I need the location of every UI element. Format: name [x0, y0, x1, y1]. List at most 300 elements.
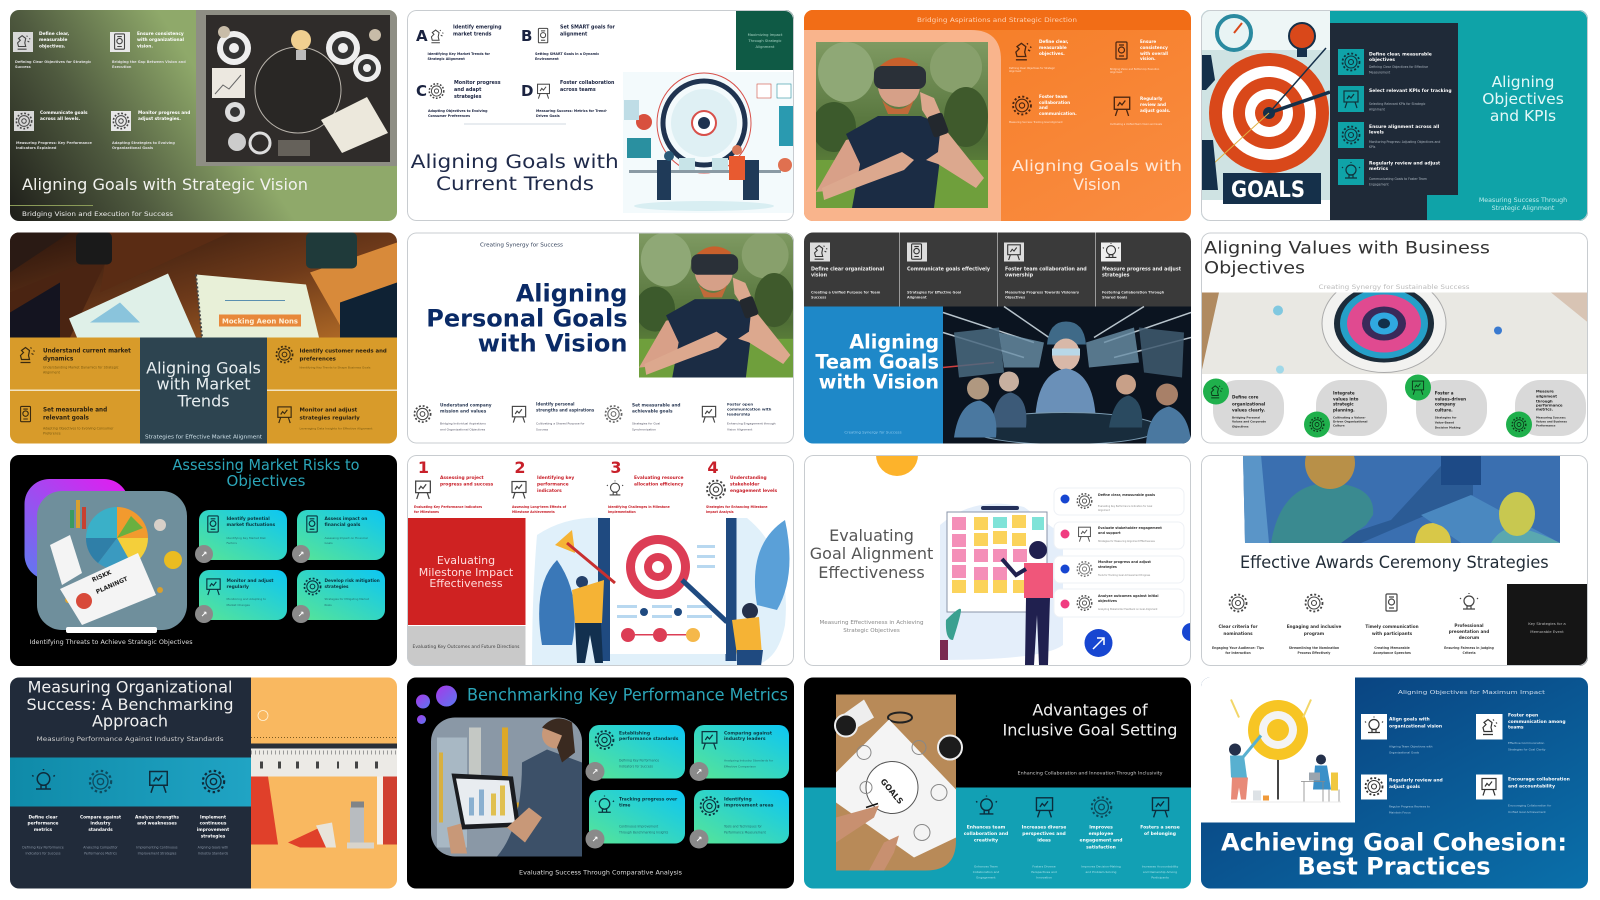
panel: Advantages of Inclusive Goal Setting: [804, 678, 1191, 888]
item 1: Understanding Market Dynamics for Strategic: [43, 366, 119, 370]
tile 3: ↗: [201, 610, 207, 619]
item 4: Measuring Success:: [1536, 416, 1566, 420]
callout: dark box: Key Strategies for a: [1528, 621, 1566, 626]
step 1: Assessing project: [440, 475, 484, 481]
title: Aligning: [849, 330, 939, 354]
dark panel with KPI list: Communicating Goals to Foster Team: [1369, 177, 1427, 181]
item 1: [1203, 378, 1284, 436]
dark panel with KPI list: Regularly review and adjust: [1369, 160, 1441, 166]
tile 3: [586, 790, 685, 848]
image: notebook on wooden table: [10, 232, 397, 338]
title: Vision: [1073, 175, 1121, 194]
tile 4: improvement areas: [724, 802, 774, 808]
subtitle: Strategies for Effective Market Alignment: [145, 434, 262, 440]
benefit 3: Improves Decision-Making: [1081, 864, 1121, 868]
tile 4: ↗: [298, 610, 304, 619]
panel: Benchmarking Key Performance Metrics: [407, 678, 794, 888]
step 4: 4: [707, 458, 719, 477]
strategy 2: Streamlining the Nomination: [1289, 646, 1339, 650]
title: Assessing Market Risks to: [172, 456, 360, 474]
dark panel with KPI list: Select relevant KPIs for tracking: [1369, 88, 1452, 94]
item 1: Defining Clear Objectives for Strategic: [1009, 67, 1056, 70]
panel: Aligning Personal Goals with Vision: [407, 232, 794, 444]
metric 4: strategies: [201, 834, 226, 840]
item D: Foster collaboration: [560, 80, 615, 86]
panel: Effective Awards Ceremony Strategies: [1201, 437, 1588, 666]
tile 2: ↗: [298, 550, 304, 559]
item 3: Set measurable and: [632, 402, 680, 408]
item 3: values-driven: [1435, 396, 1466, 402]
item 3: culture.: [1435, 408, 1453, 412]
item 2: consistency: [1140, 45, 1168, 50]
item 4: alignment: [1536, 394, 1557, 398]
tile 3: Monitoring and Adapting to: [226, 597, 266, 601]
title: Effectiveness: [818, 563, 925, 582]
strategy 1: nominations: [1223, 631, 1253, 636]
title: Team Goals: [815, 350, 939, 374]
metric 4: [197, 814, 229, 856]
item 1: Define clear organizational: [811, 266, 884, 272]
item 2: communication among: [1508, 719, 1566, 725]
strategy 2: Engaging and inclusive: [1287, 624, 1341, 629]
list item 4: objectives: [1098, 599, 1117, 603]
tile 3: Through Benchmarking Insights: [618, 830, 669, 834]
item 2: preferences: [300, 356, 336, 362]
item 2: Ensure: [1140, 39, 1156, 44]
panel: Aligning Team Goals with Vision: [804, 232, 1191, 444]
item 2: strengths and aspirations: [536, 408, 595, 412]
item D: D: [521, 82, 533, 100]
tile 3: Tracking progress over: [619, 796, 678, 802]
item: monitor progress: Adapting Strategies to Evolving: [112, 141, 175, 145]
title: [1012, 160, 1180, 190]
item: define clear objectives: measurable: [39, 37, 67, 43]
benefit 3: satisfaction: [1086, 844, 1116, 850]
metric 3: Analyze strengths: [135, 814, 179, 820]
title: [1221, 828, 1567, 880]
item 4: leadership: [727, 412, 750, 416]
item A: Strategic Alignment: [428, 57, 465, 61]
title block: Milestone Impact: [419, 566, 514, 579]
item B: alignment: [560, 32, 588, 38]
item: define clear objectives: Success: [15, 65, 31, 69]
title: Measuring Organizational: [28, 678, 232, 696]
image: man wearing VR headset: [639, 232, 794, 378]
item: communicate goals: Measuring Progress: Key Performance: [16, 141, 92, 145]
metric 3: Implementing Continuous: [136, 846, 178, 850]
list item 1: Alignment: [1098, 509, 1110, 512]
item 1: Bridging Personal: [1232, 416, 1260, 420]
item: define clear objectives: [13, 31, 91, 69]
item: ensure consistency: vision.: [137, 44, 153, 50]
list item 3: strategies: [1098, 565, 1117, 569]
title: with Vision: [819, 370, 939, 394]
item 4: Encourage collaboration: [1508, 776, 1570, 782]
tile 2: Analyzing Industry Standards for: [724, 758, 774, 762]
title block: Evaluating: [437, 554, 495, 567]
item 3: achievable goals: [632, 408, 673, 414]
tile 3: Market Changes: [226, 603, 250, 607]
title block: Effectiveness: [429, 577, 503, 590]
item 4: Monitor and adjust: [300, 408, 358, 414]
dark panel with KPI list: levels: [1369, 130, 1384, 136]
item 4: and accountability: [1508, 784, 1555, 790]
step 1: 1: [418, 458, 429, 477]
title: [426, 280, 628, 358]
item C: and adapt: [454, 87, 482, 93]
item D: [521, 80, 615, 118]
item 1: Define clear,: [1039, 39, 1069, 44]
list item 1: [1054, 488, 1184, 515]
item 3: Strategies for: [1435, 416, 1457, 420]
metric 1: Defining Key Performance: [22, 846, 64, 850]
tile 1: Establishing: [619, 730, 650, 736]
light panel: [804, 30, 1001, 221]
benefit 1: Enhances team: [967, 824, 1006, 830]
item B: Setting SMART Goals in a Dynamic: [535, 52, 599, 56]
list item 3: Tools for Tracking Goal Achievement Progress: [1098, 574, 1151, 577]
list item 2: Strategies for Measuring Alignment Effectiveness: [1098, 540, 1156, 543]
callout: green box: Through Strategic: [747, 39, 782, 43]
subtitle: Bridging Vision and Execution for Success: [22, 210, 174, 218]
strategy 1: for Interaction: [1225, 651, 1251, 655]
image: risk planning pie chart: PLANINGT: [95, 575, 130, 596]
item: monitor progress: Monitor progress and: [138, 110, 190, 116]
icon: arrow button: [1084, 629, 1112, 657]
item 4: Enhancing Engagement through: [727, 422, 776, 426]
dark panel with KPI list: Engagement: [1369, 182, 1390, 186]
item: ensure consistency: [110, 31, 186, 69]
item C: Consumer Preferences: [428, 114, 470, 118]
title: with Market: [156, 374, 251, 394]
benefit 1: Engagement: [976, 876, 996, 880]
metric 4: Industry Standards: [198, 852, 228, 856]
item 4: strategies regularly: [300, 416, 360, 422]
item 2: teams: [1508, 724, 1524, 730]
item 3: Regular Progress Reviews to: [1389, 804, 1430, 808]
item 2: Driven Organizational: [1333, 420, 1368, 424]
item 2: Cultivating a Values-: [1333, 416, 1367, 420]
item C: strategies: [454, 94, 482, 100]
callout: dark box: [1507, 584, 1588, 666]
item 4: Foster open: [727, 402, 753, 406]
benefit 4: of belonging: [1144, 831, 1176, 837]
item 2: values into: [1333, 396, 1359, 402]
item D: Driven Goals: [536, 114, 560, 118]
item 4: Vision Alignment: [727, 428, 753, 432]
strategy 2: program: [1304, 631, 1325, 636]
item 4: [1101, 242, 1182, 300]
list item 3: [1054, 556, 1184, 583]
title: Aligning Goals with: [1012, 157, 1182, 175]
benefit 2: [1022, 798, 1066, 880]
benefit 1: collaboration and: [964, 831, 1008, 837]
list item 2: and support: [1098, 531, 1121, 535]
item 1: Aligning Team Objectives with: [1389, 744, 1433, 748]
item 4: Leveraging Data Insights for Effective Alignment: [300, 426, 373, 430]
list item 1: Evaluating Key Performance Indicators for Goal: [1098, 505, 1153, 508]
strategy 4: Criteria: [1462, 651, 1476, 655]
benefit 3: engagement and: [1080, 838, 1122, 844]
decoration: sun: [876, 434, 918, 476]
item: ensure consistency: Bridging the Gap Between Vision and: [112, 60, 186, 64]
item 3: collaboration: [1039, 100, 1070, 105]
item: monitor progress: [111, 110, 190, 150]
title: [1002, 700, 1178, 740]
item 1: organizational: [1232, 402, 1266, 406]
benefit 1: [964, 796, 1008, 880]
tile 1: Indicators for Success: [619, 764, 653, 768]
item 1: [810, 242, 884, 300]
item 3: Foster team: [1039, 94, 1068, 99]
tile 4: Strategies for Mitigating Market: [324, 597, 370, 601]
item 1: Success: [811, 296, 826, 300]
item 1: Alignment: [43, 370, 61, 374]
subtitle: Strategic Alignment: [1492, 205, 1555, 212]
item D: across teams: [560, 87, 596, 93]
strategy 3: with participants: [1372, 631, 1413, 636]
item 1: organizational vision: [1389, 724, 1442, 730]
item B: B: [521, 27, 532, 45]
item 3: and: [1039, 105, 1048, 110]
item 3: Objectives: [1005, 296, 1025, 300]
item 4: Measure: [1536, 390, 1554, 394]
tile 3: time: [619, 802, 630, 808]
tile 4: Develop risk mitigation: [324, 578, 380, 583]
title: Approach: [92, 712, 168, 730]
item 1: Creating a Unified Purpose for Team: [811, 290, 881, 294]
list item 3: Monitor progress and adjust: [1098, 560, 1151, 564]
item 3: communication.: [1039, 111, 1077, 116]
tile 2: Assess impact on: [324, 516, 367, 522]
title: with Vision: [478, 330, 628, 358]
icon band: [10, 758, 251, 806]
item 3: Value-Based: [1435, 420, 1454, 424]
dark panel with KPI list: Alignment: [1369, 108, 1386, 112]
tile 1: Factors: [226, 541, 237, 545]
metric 3: Improvement Strategies: [138, 852, 177, 856]
header text: Bridging Aspirations and Strategic Direction: [917, 17, 1077, 24]
metric 3: and weaknesses: [137, 820, 177, 826]
strategy 1: Engaging Your Audience: Tips: [1212, 646, 1264, 650]
item 2: Strategies for Goal Clarity: [1508, 748, 1546, 752]
step 4: stakeholder: [730, 482, 760, 488]
metric 1: performance: [28, 820, 59, 826]
title: Aligning Goals with: [411, 152, 619, 173]
item 4: Encouraging Collaboration for: [1508, 804, 1552, 808]
item 4: [1506, 380, 1586, 438]
benefit 4: Increases Accountability: [1142, 864, 1178, 868]
tile 2: Comparing against: [724, 730, 773, 736]
dark panel with KPI list: objectives: [1369, 57, 1395, 63]
tile 2: financial goals: [324, 522, 361, 528]
item 2: with overall: [1140, 51, 1169, 56]
item: ensure consistency: with organizational: [137, 37, 184, 43]
panel: Evaluating Milestone Impact Effectiveness: [407, 455, 794, 666]
tile 1: ↗: [592, 768, 598, 776]
step 2: 2: [514, 458, 526, 477]
item 2: [907, 242, 991, 300]
metric 1: Indicators for Success: [26, 852, 61, 856]
title: and KPIs: [1490, 107, 1556, 125]
image: notebook on wooden table: Mocking Aeon Nons: [222, 318, 298, 326]
panel: Aligning Goals with Current Trends: [407, 10, 794, 221]
item 3: Synchronization: [632, 428, 656, 432]
tile 2: Goals: [324, 541, 333, 545]
list item 2: [1054, 522, 1184, 549]
item 1: dynamics: [43, 356, 74, 362]
strategy 4: Professional: [1454, 623, 1484, 628]
tile 2: industry leaders: [724, 736, 766, 742]
subtitle: Enhancing Collaboration and Innovation Through Inclusivity: [1018, 770, 1163, 776]
item: communicate goals: [14, 110, 92, 150]
strategy 1: Clear criteria for: [1218, 624, 1258, 629]
step 2: indicators: [537, 488, 562, 494]
item: monitor progress: Organizational Goals: [112, 146, 153, 150]
panel: Evaluating Goal Alignment Effectiveness: [804, 434, 1200, 666]
list item 4: [1054, 589, 1184, 617]
tile 1: market fluctuations: [226, 522, 276, 528]
item 2: Identify customer needs and: [300, 348, 387, 354]
tile 1: ↗: [201, 550, 207, 559]
dark panel with KPI list: Ensure alignment across all: [1369, 124, 1440, 130]
illustration: person at sticky-note board: [940, 504, 1063, 665]
step 3: Implementation: [608, 510, 636, 514]
image: goals diagram on desk: [835, 694, 962, 870]
strategy 4: [1444, 593, 1494, 655]
tile 2: [690, 725, 789, 781]
item 3: Decision Making: [1435, 426, 1461, 430]
panel: Measuring Organizational Success: [10, 678, 397, 888]
list item 4: Analyzing Stakeholder Feedback on Goal Alignment: [1098, 608, 1157, 611]
panel: Aligning Objectives and KPIs: [1201, 10, 1588, 221]
item 1: [1361, 714, 1442, 754]
metric 2: Performance Metrics: [84, 852, 117, 856]
tile 4: [690, 790, 789, 848]
item 3: [1009, 94, 1077, 124]
item: define clear objectives: objectives.: [39, 44, 66, 50]
step 4: engagement levels: [730, 488, 777, 494]
item B: [521, 24, 616, 61]
item B: Environment: [535, 57, 559, 61]
item C: [416, 80, 501, 118]
item 3: [605, 402, 680, 432]
benefit 3: and Problem-Solving: [1086, 870, 1117, 874]
step 2: Identifying key: [537, 475, 574, 481]
item 3: [1004, 242, 1087, 300]
title: Aligning Goals with Strategic Vision: [22, 175, 308, 194]
benefit 1: Enhances Team: [974, 864, 998, 868]
step 3: [607, 458, 684, 514]
item 1: Align goals with: [1389, 716, 1430, 722]
tile 3: Monitor and adjust: [226, 578, 274, 584]
panel: Assessing Market Risks to Objectives: [10, 455, 397, 666]
tile 3: ↗: [592, 835, 598, 844]
item 2: vision.: [1140, 56, 1156, 61]
image: engineer with tablet: [431, 718, 582, 856]
title block: [407, 518, 526, 625]
item: communicate goals: Communicate goals: [40, 110, 88, 116]
benefit 2: Innovation: [1036, 876, 1052, 880]
item 4: Unified Goal Achievement: [1508, 810, 1546, 814]
dark panel with KPI list: Monitoring Progress: Adjusting Objectives and: [1369, 140, 1440, 144]
tile 2: ↗: [696, 768, 702, 776]
item 3: Adapting Objectives to Evolving Consumer: [43, 426, 114, 430]
title: Objectives: [227, 472, 306, 490]
title: Achieving Goal Cohesion:: [1221, 828, 1567, 856]
callout: dark box: Memorable Event: [1530, 629, 1564, 634]
benefit 3: Improves: [1089, 824, 1113, 830]
item 3: [21, 406, 114, 436]
item 3: Set measurable and: [43, 408, 107, 414]
callout: green box: [736, 10, 794, 70]
subtitle block: [407, 626, 526, 666]
image: man wearing VR headset: [816, 42, 988, 208]
image: target with team at desk: [623, 72, 794, 213]
item 1: Alignment: [1009, 70, 1021, 73]
metric 2: industry: [90, 820, 111, 826]
benefit 2: Fosters Diverse: [1032, 864, 1056, 868]
item: define clear objectives: Define clear,: [39, 31, 69, 37]
item 2: planning.: [1333, 408, 1355, 412]
title: [815, 330, 939, 394]
item 4: adjust goals.: [1140, 108, 1171, 113]
item 2: Integrate: [1333, 390, 1355, 396]
metric 1: [22, 814, 64, 856]
item 2: [512, 402, 595, 432]
subtitle block: Evaluating Key Outcomes and Future Directions: [412, 644, 520, 649]
item 3: Strategies for Goal: [632, 422, 660, 426]
item: ensure consistency: Ensure consistency: [137, 31, 184, 37]
item 2: Alignment: [1110, 71, 1122, 74]
item 2: Communicate goals effectively: [907, 266, 991, 272]
title: Current Trends: [436, 174, 594, 195]
item 4: Shared Goals: [1102, 296, 1127, 300]
benefit 2: Perspectives and: [1031, 870, 1057, 874]
item 2: [1476, 712, 1566, 752]
item 4: Regularly: [1140, 96, 1163, 101]
image: GOALS target with arrow: GOALS: [1231, 178, 1305, 203]
step 1: [414, 458, 494, 514]
item 2: [1304, 380, 1387, 438]
callout: green box: Maximizing Impact: [748, 33, 783, 37]
tile 3: Continuous Improvement: [619, 824, 659, 828]
title: [26, 678, 234, 730]
item 2: Bridging Vision and Bottom-Up Execution: [1110, 68, 1160, 71]
item 3: relevant goals: [43, 416, 90, 422]
step 2: performance: [537, 482, 569, 488]
item 4: strategies: [1102, 272, 1130, 278]
item A: Identifying Key Market Trends for: [428, 52, 490, 56]
item 4: [1110, 96, 1171, 126]
strategy 3: [1365, 594, 1419, 655]
step 1: progress and success: [440, 482, 494, 488]
item 3: Foster team collaboration and: [1005, 266, 1087, 272]
item 4: through: [1536, 400, 1553, 404]
strategy 2: Process Effectively: [1298, 651, 1330, 655]
panel: Aligning Values with Business Objectives: [1201, 232, 1588, 444]
tile 4: Risks: [324, 603, 332, 607]
benefit 4: Participants: [1151, 876, 1169, 880]
item 3: Foster a: [1435, 390, 1454, 396]
panel: Achieving Goal Cohesion: [1201, 678, 1588, 888]
strategy 4: presentation and: [1449, 629, 1489, 634]
item 3: [1405, 374, 1487, 436]
strategy 3: Acceptance Speeches: [1373, 651, 1411, 655]
image: GOALS target with arrow: [1201, 10, 1330, 221]
tile 1: performance standards: [619, 736, 679, 742]
item 1: vision: [811, 272, 828, 278]
